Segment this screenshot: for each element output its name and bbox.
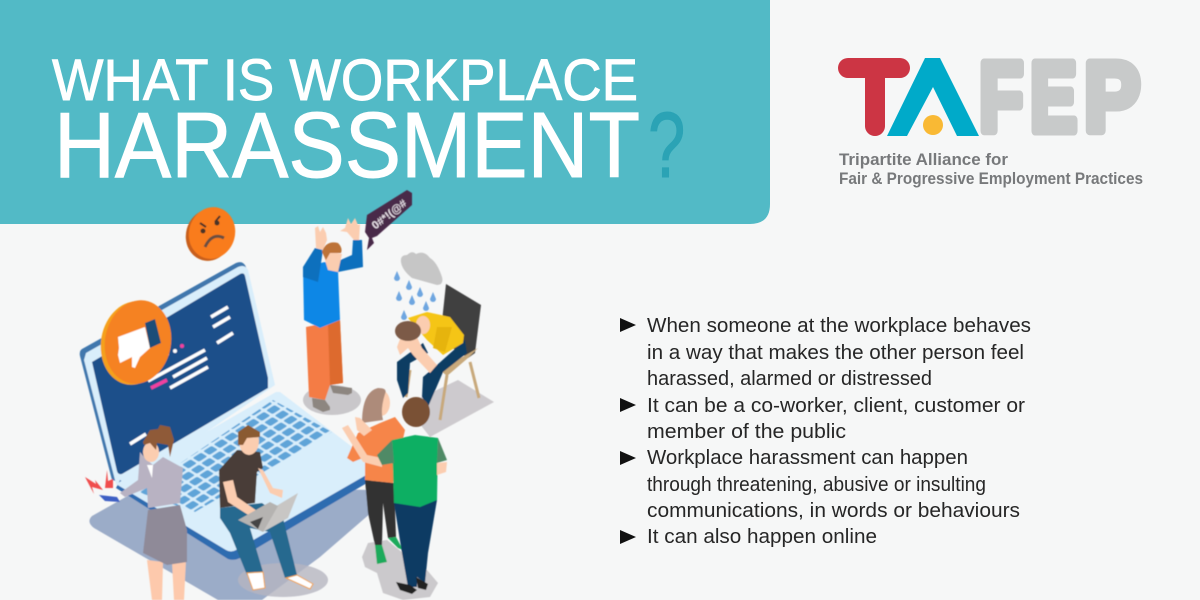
laptop screen (92, 273, 268, 474)
person: man with laptop (219, 425, 328, 597)
person: woman with phone (85, 425, 187, 600)
bullet 3 (620, 447, 1020, 522)
bullet 1: When someone at the workplace behaves (647, 315, 1031, 337)
cloud and raindrops (394, 252, 442, 320)
logo letters FEP: P (1084, 43, 1140, 152)
logo tagline: Tripartite Alliance for (839, 150, 1008, 169)
logo dot (923, 115, 943, 135)
title: HARASSMENT (54, 93, 640, 197)
header panel (0, 0, 770, 224)
bullet 4: It can also happen online (647, 526, 877, 548)
people: couple (342, 388, 447, 600)
bullet 1: in a way that makes the other person feel (647, 342, 1024, 364)
laptop (80, 262, 372, 560)
logo letters FEP: E (1030, 44, 1077, 153)
laptop base (116, 392, 372, 552)
bullet 3: through threatening, abusive or insulting (647, 474, 986, 496)
laptop base edge (116, 468, 372, 560)
bullet 2: It can be a co-worker, client, customer or (647, 395, 1025, 417)
bullet 2 (620, 395, 1025, 443)
bullet 2: member of the public (647, 421, 846, 443)
icon: angry face (180, 202, 241, 266)
bullet 1: harassed, alarmed or distressed (647, 368, 932, 390)
bullet list (620, 315, 1031, 548)
screen content lines (130, 307, 233, 444)
title: WHAT IS WORKPLACE (52, 48, 638, 113)
logo tagline: Fair & Progressive Employment Practices (839, 169, 1143, 188)
person: sad man on chair (395, 284, 494, 437)
title (52, 48, 685, 198)
title: ? (648, 94, 685, 198)
logo letters FEP (979, 43, 1140, 153)
laptop shadow (89, 485, 372, 600)
speech bubble with symbols (365, 190, 412, 250)
logo tagline (839, 150, 1143, 188)
logo letters FEP: F (979, 43, 1023, 153)
keyboard (138, 400, 332, 512)
TAFEP logo (839, 43, 1143, 188)
bullet 1 (620, 315, 1031, 390)
person: standing man with raised arms (303, 218, 363, 415)
icon: thumbs down (94, 295, 178, 390)
logo mark: A (887, 58, 979, 136)
speech bubble with symbols: 0#*!(@# (370, 198, 409, 232)
laptop screen frame (80, 262, 274, 482)
logo mark: T (848, 68, 900, 126)
bullet 3: communications, in words or behaviours (647, 500, 1020, 522)
illustration (80, 190, 494, 600)
bullet 3: Workplace harassment can happen (647, 447, 968, 469)
